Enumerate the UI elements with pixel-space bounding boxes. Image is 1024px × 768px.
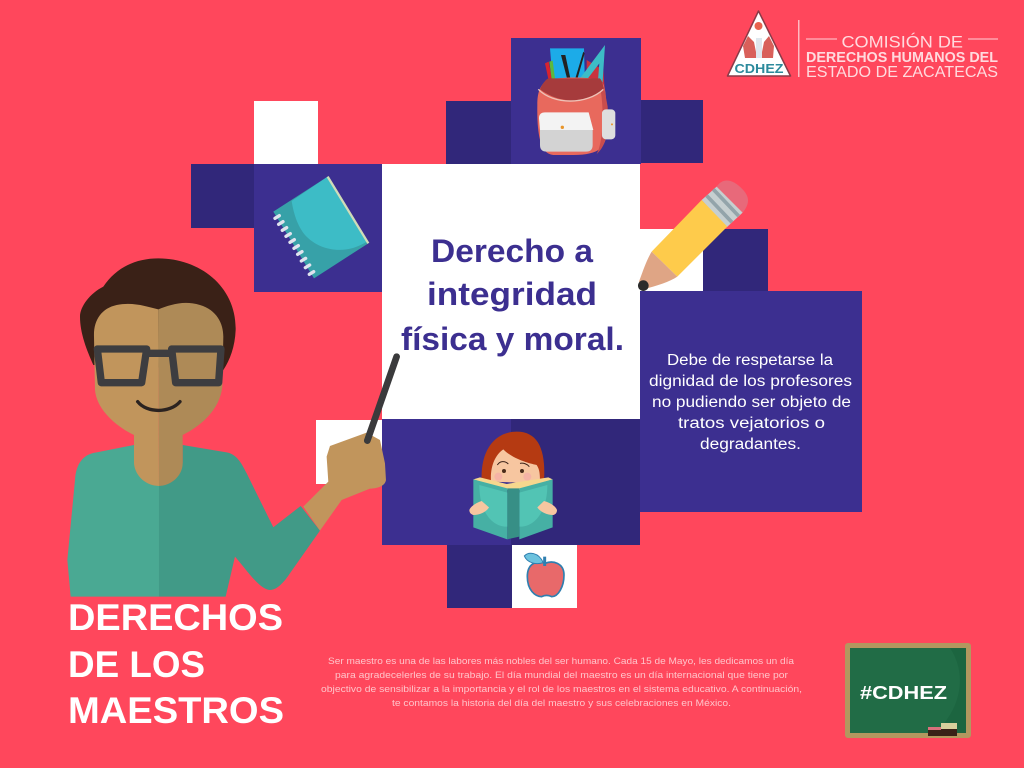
icon: apple	[524, 553, 564, 597]
description text: no pudiendo ser objeto de	[652, 394, 851, 411]
intro paragraph	[321, 656, 802, 709]
icon: pencil	[638, 180, 748, 291]
description text	[649, 352, 852, 453]
heading: derechos de los maestros	[68, 597, 284, 731]
panel: description	[640, 291, 862, 512]
heading: derechos de los maestros: DE LOS	[68, 644, 205, 685]
heading: derecho: Derecho a	[431, 233, 594, 269]
logo triangle: CDHEZ	[734, 61, 784, 76]
intro paragraph: Ser maestro es una de las labores más nobles del ser humano. Cada 15 de Mayo, les dedicamos un día	[328, 656, 795, 667]
panel: central title card	[382, 164, 640, 419]
heading: derechos de los maestros: DERECHOS	[68, 597, 283, 638]
heading: derecho: física y moral.	[401, 321, 624, 357]
description text: tratos vejatorios o	[678, 415, 825, 432]
hashtag text: #CDHEZ	[860, 682, 947, 703]
logo wordmark: ESTADO DE ZACATECAS	[806, 64, 998, 81]
chalk and eraser	[928, 723, 957, 736]
intro paragraph: objectivo de sensibilizar a la importancia y el rol de los maestros en el sistema educativo. A continuación,	[321, 684, 802, 695]
description text: degradantes.	[700, 436, 801, 453]
heading: derechos de los maestros: MAESTROS	[68, 690, 284, 731]
icon: backpack	[537, 45, 615, 155]
chalkboard hashtag	[845, 643, 971, 738]
description text: dignidad de los profesores	[649, 373, 852, 390]
icon: notebook	[273, 177, 368, 278]
logo triangle	[728, 11, 790, 76]
intro paragraph: te contamos la historia del día del maestro y sus celebraciones en México.	[392, 698, 731, 709]
logo wordmark: DERECHOS HUMANOS DEL	[806, 50, 998, 66]
logo wordmark	[806, 32, 998, 81]
intro paragraph: para agradecelerles de su trabajo. El día mundial del maestro es un día internacional que tiene por	[335, 670, 788, 681]
illustration: teacher with pointer	[67, 258, 397, 597]
logo: CDHEZ	[728, 11, 998, 81]
heading: derecho: integridad	[427, 276, 597, 312]
icon: child reading a book	[469, 432, 557, 539]
description text: Debe de respetarse la	[667, 352, 833, 369]
logo wordmark: COMISIÓN DE	[842, 32, 963, 52]
tile mosaic background	[191, 38, 768, 608]
heading: derecho	[401, 233, 624, 357]
